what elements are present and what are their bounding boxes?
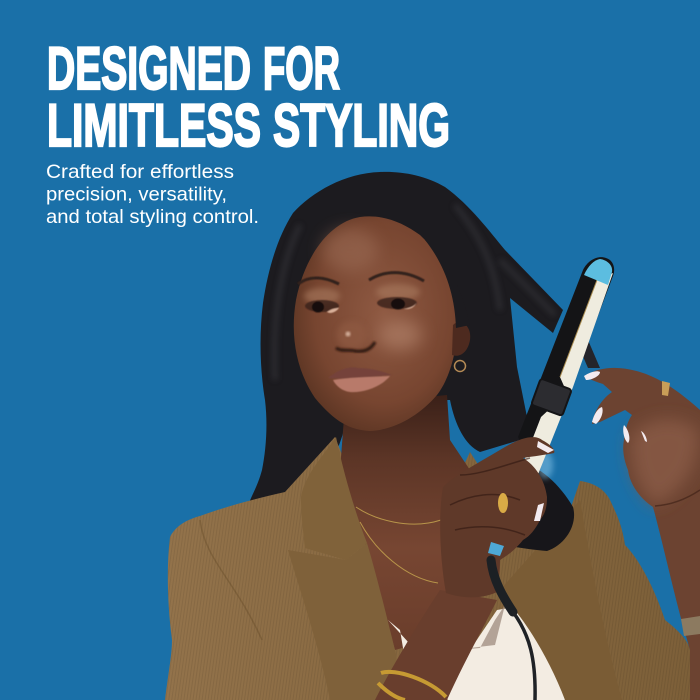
subheading text: Crafted for effortless: [46, 161, 234, 183]
raised right hand and arm: [584, 368, 700, 700]
gold ring: [662, 381, 670, 396]
iron black body: [518, 257, 614, 477]
subheading text: [46, 161, 259, 228]
cheek highlights: [378, 320, 422, 350]
ring: [498, 493, 508, 513]
iron gold line: [560, 280, 597, 377]
face: [294, 216, 457, 431]
iron button slider: [531, 378, 572, 416]
eyelid shadow: [304, 288, 340, 304]
necklaces: [356, 507, 441, 583]
iron blue collar: [488, 542, 504, 556]
hair strand past iron: [578, 340, 600, 368]
woman portrait illustration: [165, 172, 700, 700]
heading: STYLING: [273, 92, 450, 159]
eyebrows: [298, 273, 424, 284]
iron cord: [491, 560, 535, 700]
left forearm and bracelets: [375, 590, 497, 700]
subheading text: precision, versatility,: [46, 184, 227, 206]
watch band: [681, 616, 700, 636]
iron silver plate: [522, 273, 613, 477]
iron glow: [537, 451, 553, 479]
hair: [249, 172, 563, 505]
palm shading: [631, 419, 698, 505]
subheading text: and total styling control.: [46, 206, 259, 228]
heading: [47, 35, 450, 159]
jacket: [165, 437, 690, 700]
heading: DESIGNED: [47, 35, 251, 102]
front hair at right of face: [425, 240, 470, 328]
nose: [336, 321, 375, 351]
hand holding iron: [440, 437, 554, 597]
hair below hand: [505, 460, 574, 551]
lips: [328, 367, 392, 392]
small nail: [534, 503, 544, 521]
jacket left lapel and collar: [200, 437, 397, 700]
neck and chest: [340, 395, 470, 650]
hair highlights: [274, 205, 555, 380]
heading: LIMITLESS: [47, 92, 261, 159]
heading: FOR: [263, 35, 340, 102]
white camisole with lace: [388, 605, 565, 700]
eyes: [305, 297, 417, 313]
jacket right lapel: [500, 500, 622, 700]
ear and earring: [452, 322, 470, 372]
fingernails: [584, 371, 647, 443]
curling iron: [518, 257, 614, 479]
gold bracelets: [378, 672, 446, 700]
iron blue cap: [584, 259, 612, 285]
thumb nail: [537, 441, 554, 453]
